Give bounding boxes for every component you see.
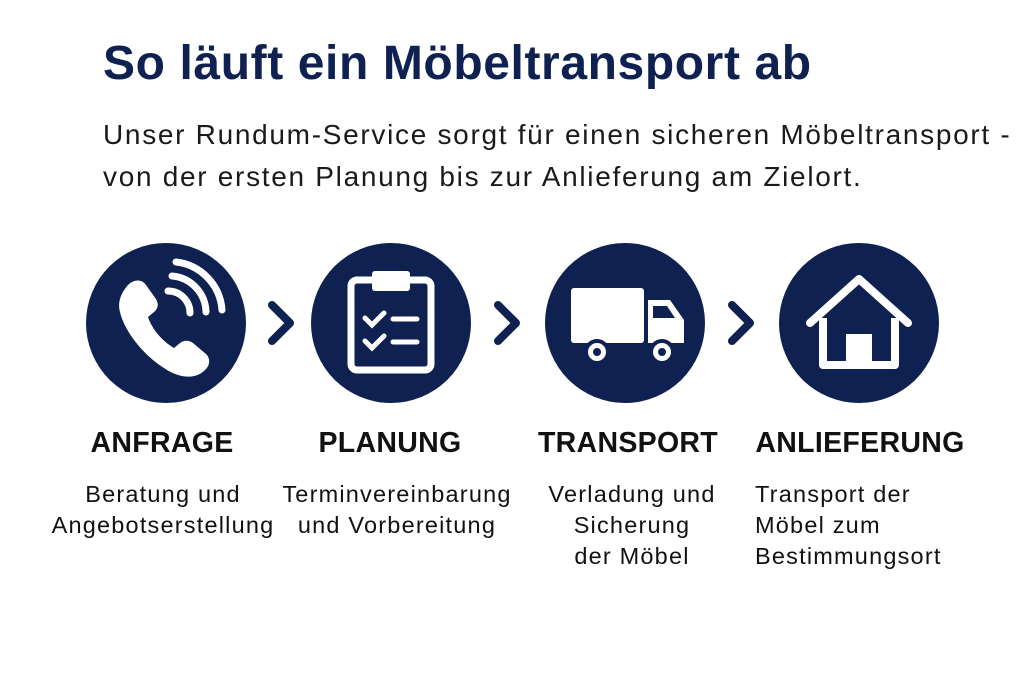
text: TRANSPORT bbox=[538, 427, 718, 459]
icon: house bbox=[779, 243, 939, 403]
step labels: ANFRAGE bbox=[90, 427, 234, 459]
text: Bestimmungsort bbox=[755, 543, 942, 569]
icon: phone bbox=[86, 243, 246, 403]
title: So läuft ein Möbeltransport ab bbox=[103, 37, 812, 90]
step descriptions: Angebotserstellung bbox=[52, 512, 274, 538]
text: ANLIEFERUNG bbox=[755, 427, 965, 459]
step descriptions: Beratung und bbox=[85, 481, 241, 507]
text: PLANUNG bbox=[318, 427, 462, 459]
text: Transport der bbox=[755, 481, 911, 507]
subtitle bbox=[103, 119, 1011, 192]
arrow bbox=[498, 305, 516, 341]
text: der Möbel bbox=[574, 543, 690, 569]
icon: clipboard bbox=[311, 243, 471, 403]
text: Terminvereinbarung bbox=[282, 481, 512, 507]
text: Möbel zum bbox=[755, 512, 881, 538]
text: Sicherung bbox=[574, 512, 690, 538]
arrow bbox=[732, 305, 750, 341]
process icons bbox=[86, 243, 939, 403]
text: und Vorbereitung bbox=[298, 512, 496, 538]
subtitle: von der ersten Planung bis zur Anlieferung am Zielort. bbox=[103, 161, 862, 192]
icon: truck bbox=[545, 243, 705, 403]
step descriptions bbox=[52, 481, 274, 538]
arrow bbox=[272, 305, 290, 341]
subtitle: Unser Rundum-Service sorgt für einen sicheren Möbeltransport - bbox=[103, 119, 1011, 150]
text: Verladung und bbox=[548, 481, 716, 507]
